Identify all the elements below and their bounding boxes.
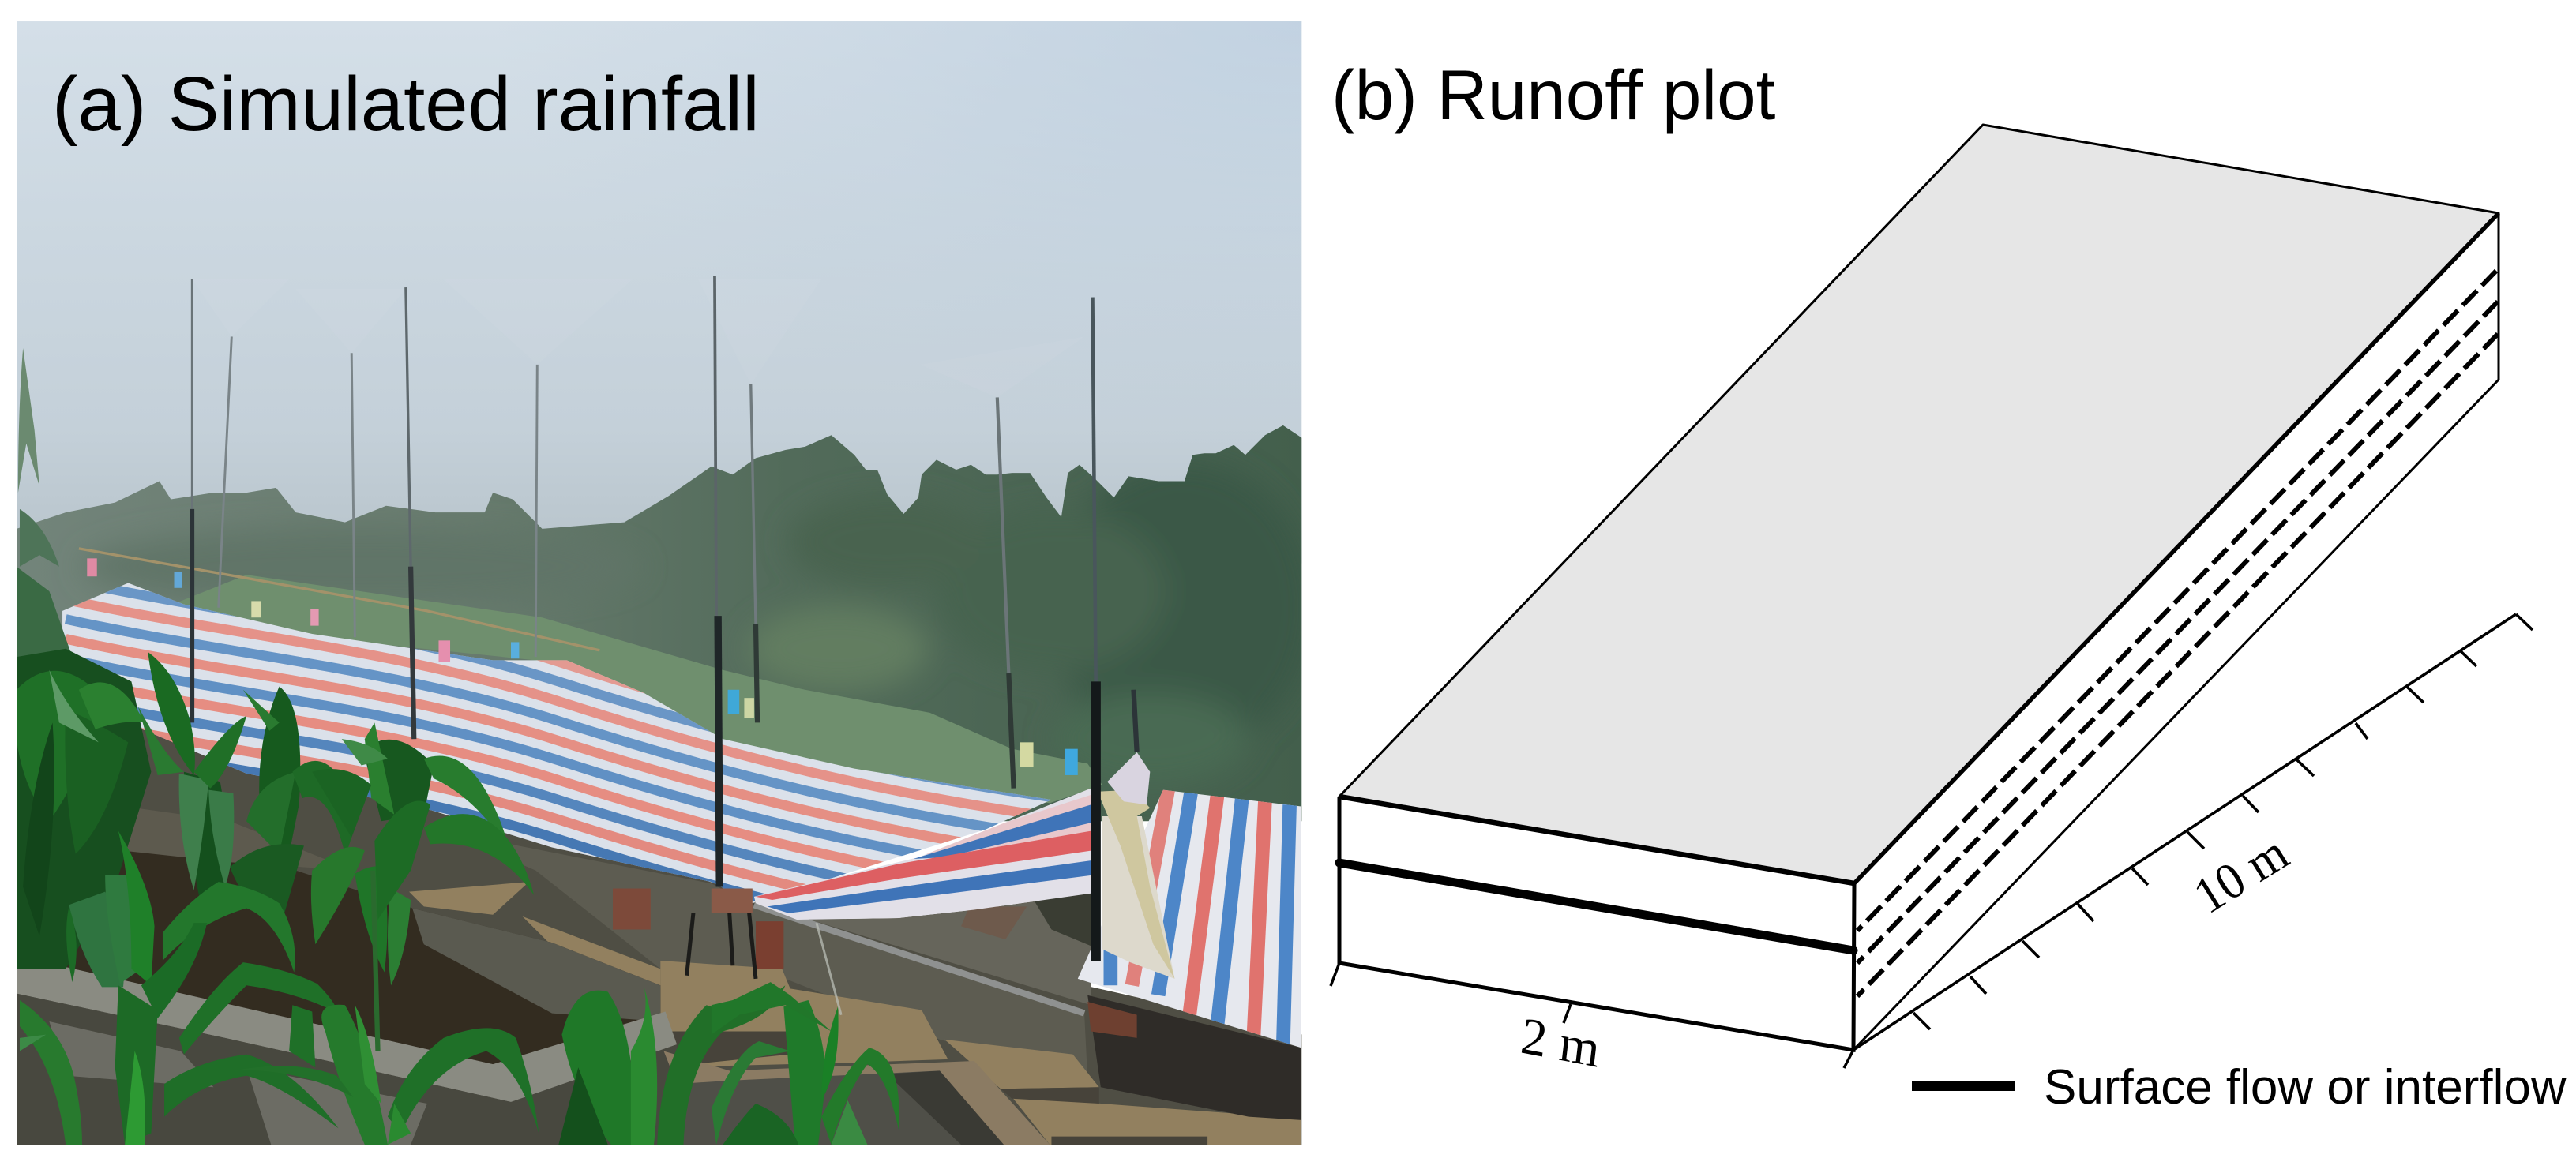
tree line <box>17 425 1303 821</box>
label: 10 m: 10 m <box>2184 824 2298 924</box>
sprinkler poles <box>192 276 1137 961</box>
grey block wall behind maize <box>128 808 325 868</box>
10 m dimension axis <box>1853 614 2533 1050</box>
2 m dimension axis <box>1331 963 1853 1068</box>
steel pipe <box>754 905 1084 1014</box>
rain gauge cups <box>87 558 1078 775</box>
dark void below right tarp <box>1087 995 1301 1120</box>
small striped bundle <box>1107 752 1150 804</box>
concrete kerb <box>17 956 677 1102</box>
foreground maize plant centre <box>558 985 785 1145</box>
tan concrete steps <box>409 882 1301 1145</box>
concrete collection tank <box>663 1051 1050 1145</box>
brick stack and stand <box>613 888 783 979</box>
legend <box>1912 1060 2567 1115</box>
legend line swatch <box>1912 1081 2015 1091</box>
cream cloth at tarp corner <box>1098 790 1174 979</box>
water jet <box>817 923 841 1015</box>
left maize clump <box>17 649 151 969</box>
forest tones <box>82 460 1314 785</box>
maize plants <box>17 348 899 1145</box>
folded striped tarp <box>754 788 1091 920</box>
thick surface flow line on front face <box>1339 863 1853 950</box>
legend text: Surface flow or interflow <box>2044 1060 2567 1115</box>
tall leaf maize <box>138 652 246 906</box>
heading: (a) Simulated rainfall: (a) Simulated rainfall <box>52 61 760 147</box>
soil bed <box>66 851 660 1064</box>
dark step faces <box>660 1031 1207 1145</box>
fence rope <box>79 549 599 650</box>
panel: simulated rainfall photograph <box>8 21 1314 1145</box>
panel: runoff plot diagram <box>1331 55 2567 1115</box>
lower ground base <box>17 729 1301 1145</box>
foreground maize plant right <box>712 982 899 1145</box>
dark shrubs and blocks behind pipe <box>961 888 1091 946</box>
plot top surface <box>1339 125 2499 883</box>
far left thin leaves <box>18 348 39 493</box>
heading: (b) Runoff plot: (b) Runoff plot <box>1331 55 1776 134</box>
label: 2 m: 2 m <box>1518 1006 1603 1079</box>
concrete retaining wall <box>512 845 1087 1072</box>
green hillside maize row <box>164 575 1102 803</box>
plot front face <box>1339 797 1854 1050</box>
wall above pipe <box>810 894 1091 1004</box>
foreground large maize plant <box>20 831 339 1145</box>
plot side face <box>1853 213 2499 1050</box>
right striped tarp <box>1077 789 1301 1048</box>
middle maize clump <box>230 687 354 920</box>
dashed interflow lines on side face <box>1857 271 2498 996</box>
striped tarpaulin on runoff plot <box>62 583 1052 903</box>
sky <box>17 21 1303 564</box>
right maize plant, arching leaves <box>311 722 534 1051</box>
wall beside soil <box>412 908 660 1021</box>
kerb maize plant <box>273 1004 539 1145</box>
bricks under right tarp <box>1087 1002 1137 1038</box>
sprinkler spray fans <box>192 279 1084 397</box>
lower concrete face <box>17 994 682 1145</box>
